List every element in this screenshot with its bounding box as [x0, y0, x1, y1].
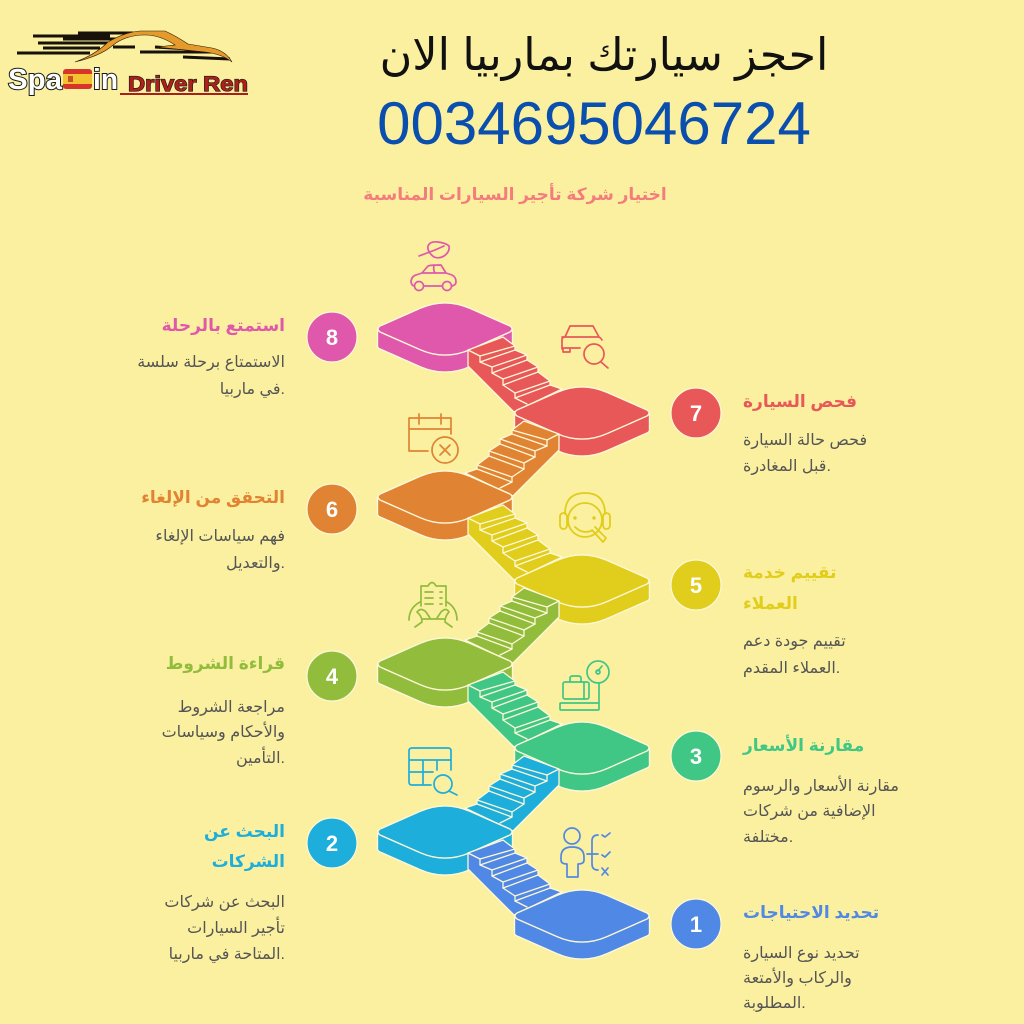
- description: فحص حالة السيارة: [743, 432, 867, 449]
- heading: تقييم خدمة: [743, 563, 836, 582]
- description: [743, 945, 860, 1012]
- heading: التحقق من الإلغاء: [141, 488, 285, 507]
- description: المتاحة في ماربيا.: [169, 946, 285, 963]
- platform 6: [378, 471, 512, 540]
- text block: step 7: [743, 392, 867, 475]
- heading: فحص السيارة: [743, 392, 857, 411]
- description: [137, 354, 285, 398]
- icon: calendar with x: [409, 414, 458, 463]
- description: العملاء المقدم.: [743, 660, 840, 677]
- step badge 1: [671, 899, 721, 949]
- stair 3: [468, 672, 562, 747]
- step badge 3: 3: [690, 744, 702, 769]
- platform 8: [378, 303, 512, 372]
- step badge 7: 7: [690, 401, 702, 426]
- stair 5: [468, 505, 562, 580]
- description: الإضافية من شركات: [743, 803, 876, 820]
- icon: car with leaf: [411, 242, 456, 290]
- step badge 6: 6: [326, 497, 338, 522]
- heading: العملاء: [743, 594, 798, 613]
- logo: Spain Driver Rent: [8, 31, 248, 96]
- description: مقارنة الأسعار والرسوم: [743, 778, 899, 795]
- logo: car swoosh: [17, 31, 232, 62]
- heading: قراءة الشروط: [166, 654, 285, 673]
- subtitle: اختيار شركة تأجير السيارات المناسبة: [363, 185, 667, 204]
- description: [155, 528, 285, 572]
- description: البحث عن شركات: [164, 894, 285, 911]
- phone number: 0034695046724: [377, 90, 811, 157]
- step badge 6: [307, 484, 357, 534]
- icon: luggage on scale: [560, 661, 609, 710]
- text block: step 1: [743, 903, 879, 1012]
- heading: [743, 563, 836, 613]
- logo: Spa wordmark: Spa: [8, 64, 63, 96]
- platform 3: [514, 722, 650, 791]
- step badge 8: 8: [326, 325, 338, 350]
- icon: person with checklist: [561, 828, 610, 877]
- step badge 5: [671, 560, 721, 610]
- description: فهم سياسات الإلغاء: [155, 528, 285, 545]
- description: [743, 432, 867, 475]
- text block: step 5: [743, 563, 846, 677]
- step badge 4: [307, 651, 357, 701]
- description: [164, 894, 285, 963]
- step badge 4: 4: [326, 664, 339, 689]
- step badge 3: [671, 731, 721, 781]
- step badge 1: 1: [690, 912, 702, 937]
- heading: مقارنة الأسعار: [743, 736, 864, 755]
- description: [162, 699, 285, 767]
- stair 6: [465, 421, 559, 496]
- heading: البحث عن: [204, 822, 285, 841]
- icon: table with magnifier: [409, 748, 457, 795]
- heading: استمتع بالرحلة: [162, 316, 285, 335]
- platform 5: [514, 555, 650, 624]
- logo: in wordmark: in: [93, 64, 118, 96]
- description: قبل المغادرة.: [743, 458, 831, 475]
- heading: تحديد الاحتياجات: [743, 903, 879, 922]
- description: التأمين.: [236, 750, 285, 767]
- logo: Spanish flag: [63, 69, 92, 89]
- logo: Driver Ren wordmark: Driver Ren: [128, 73, 248, 96]
- text block: step 2: [164, 822, 285, 963]
- step badge 8: [307, 312, 357, 362]
- description: في ماربيا.: [220, 381, 285, 398]
- icon: car inspection: [562, 326, 608, 368]
- description: تأجير السيارات: [187, 920, 285, 937]
- icon: clipboard in hands: [409, 582, 457, 627]
- platform 7: [514, 387, 650, 456]
- platform 2: [378, 806, 512, 875]
- staircase diagram: [378, 303, 650, 959]
- description: والتعديل.: [226, 555, 285, 572]
- text block: step 8: [137, 316, 285, 398]
- heading: [204, 822, 285, 872]
- description: مختلفة.: [743, 829, 793, 846]
- stair 1: [468, 840, 562, 915]
- description: المطلوبة.: [743, 995, 806, 1012]
- text block: step 6: [141, 488, 285, 572]
- platform 1: [514, 890, 650, 959]
- heading: الشركات: [212, 852, 285, 871]
- description: تحديد نوع السيارة: [743, 945, 860, 962]
- description: تقييم جودة دعم: [743, 633, 846, 650]
- step badge 5: 5: [690, 573, 702, 598]
- step badge 7: [671, 388, 721, 438]
- text block: step 4: [162, 654, 285, 767]
- platform 4: [378, 638, 512, 707]
- icon: customer support headset: [560, 493, 610, 542]
- description: الاستمتاع برحلة سلسة: [137, 354, 285, 371]
- description: والركاب والأمتعة: [743, 970, 852, 987]
- step badge 2: [307, 818, 357, 868]
- description: [743, 776, 899, 846]
- title: احجز سيارتك بماربيا الان: [380, 31, 828, 80]
- stair 7: [468, 337, 562, 412]
- description: [743, 633, 846, 677]
- stair 2: [465, 756, 559, 831]
- stair 4: [465, 588, 559, 663]
- text block: step 3: [742, 734, 899, 846]
- description: والأحكام وسياسات: [162, 724, 285, 741]
- description: مراجعة الشروط: [178, 699, 285, 716]
- step badge 2: 2: [326, 831, 338, 856]
